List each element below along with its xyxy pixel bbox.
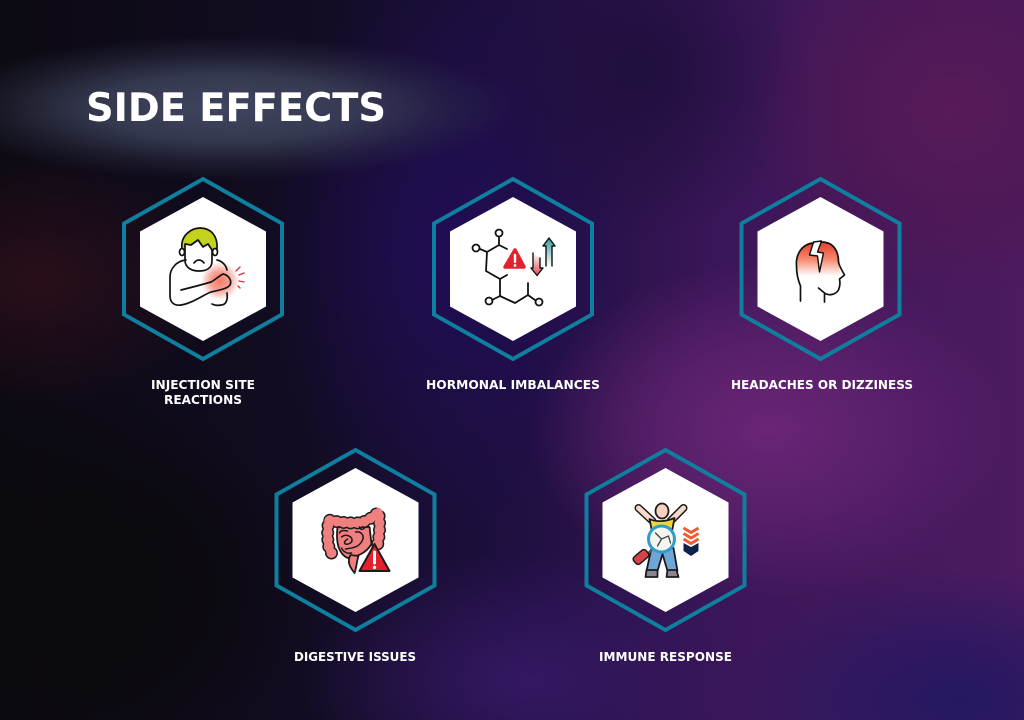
label: INJECTION SITE <box>151 377 255 392</box>
panel: injection site reactions <box>124 179 282 407</box>
label: DIGESTIVE ISSUES <box>294 649 416 664</box>
icon: person holding sore arm <box>170 228 244 305</box>
hexagon frame <box>586 450 744 630</box>
title: SIDE EFFECTS <box>86 86 386 131</box>
hexagon frame <box>434 179 592 359</box>
icon: head with lightning <box>796 241 844 302</box>
label: REACTIONS <box>164 392 242 407</box>
label: IMMUNE RESPONSE <box>599 649 732 664</box>
panel: headaches or dizziness <box>731 179 913 392</box>
label <box>151 377 255 407</box>
icon: molecule with warning and arrows <box>472 230 555 306</box>
panel: digestive issues <box>276 450 434 664</box>
panel: immune response <box>586 450 744 664</box>
icon: person with magnifier and chevrons <box>632 504 698 577</box>
label: HEADACHES OR DIZZINESS <box>731 377 913 392</box>
icon: intestines with warning <box>328 512 390 573</box>
hexagon frame <box>276 450 434 630</box>
panel: hormonal imbalances <box>426 179 600 392</box>
label: HORMONAL IMBALANCES <box>426 377 600 392</box>
hexagon frame <box>742 179 900 359</box>
hexagon frame <box>124 179 282 359</box>
